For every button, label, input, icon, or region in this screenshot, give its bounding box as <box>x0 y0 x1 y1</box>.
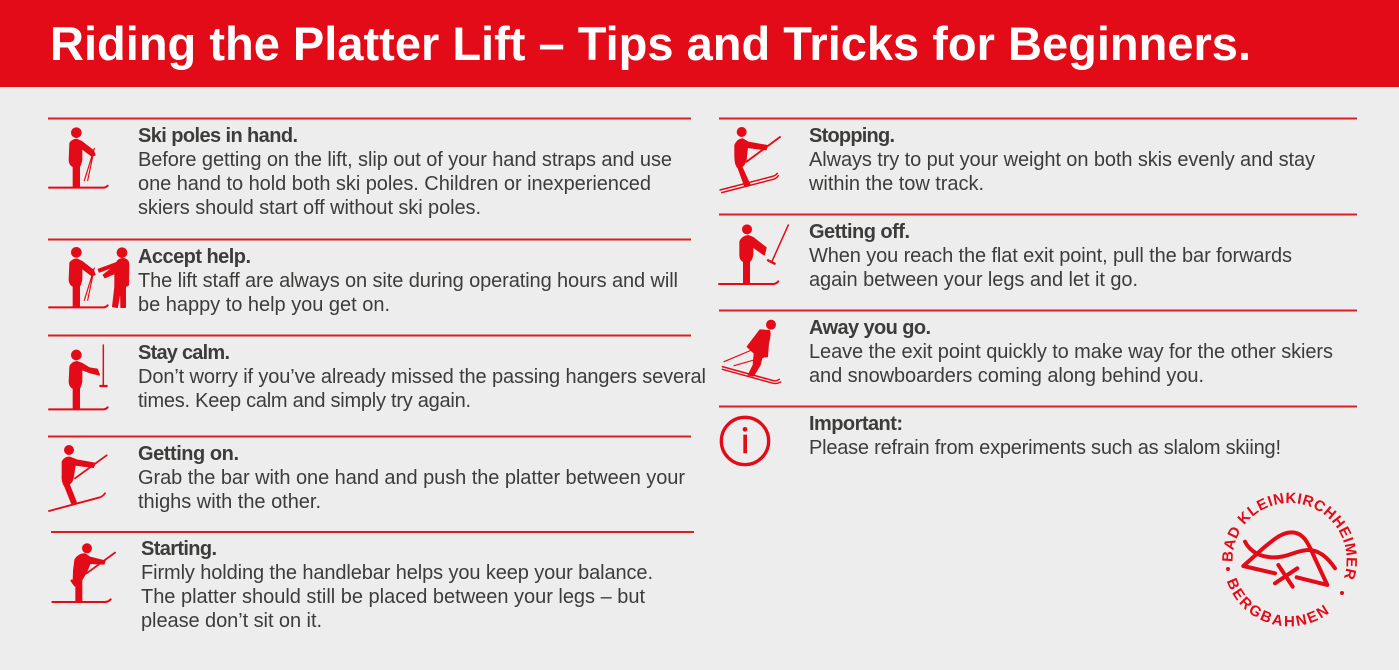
tip: getting on: Getting on. <box>138 443 239 465</box>
tip: stay calm <box>48 336 706 412</box>
tip: stay calm: Don’t worry if you’ve already missed the passing hangers several <box>138 366 706 388</box>
tip: ski poles in hand: skiers should start off without ski poles. <box>138 197 481 219</box>
icon: skier leaving downhill <box>722 320 781 383</box>
tip: stay calm: times. Keep calm and simply try again. <box>138 390 471 412</box>
tip: stay calm: Stay calm. <box>138 342 230 364</box>
icon: skier starting on lift <box>52 543 115 602</box>
tip: accept help: The lift staff are always on site during operating hours and will <box>138 270 678 292</box>
tip: getting off: again between your legs and let it go. <box>809 269 1138 291</box>
tip: away you go: and snowboarders coming along behind you. <box>809 365 1204 387</box>
header banner <box>0 0 1399 87</box>
tip: accept help <box>48 240 691 316</box>
logo: Bad Kleinkirchheimer Bergbahnen: BAD KLEINKIRCHHEIMER <box>1222 492 1357 580</box>
tip: getting on: Grab the bar with one hand and push the platter between your <box>138 467 685 489</box>
icon: skier with lift staff <box>49 247 129 307</box>
tip: starting: Firmly holding the handlebar helps you keep your balance. <box>141 562 653 584</box>
tip: getting off <box>719 214 1357 291</box>
tip: ski poles in hand: Before getting on the lift, slip out of your hand straps and use <box>138 149 672 171</box>
tip: ski poles in hand: Ski poles in hand. <box>138 125 298 147</box>
tip: starting <box>51 532 694 632</box>
tip: stopping: Stopping. <box>809 125 895 147</box>
icon: information circle <box>721 417 769 465</box>
tip: away you go: Away you go. <box>809 317 931 339</box>
icon: skier riding uphill <box>720 127 780 193</box>
tip: getting on <box>48 436 691 513</box>
tip: ski poles in hand <box>48 118 691 219</box>
tip: stopping: Always try to put your weight on both skis evenly and stay <box>809 149 1315 171</box>
tip: away you go <box>719 310 1357 387</box>
tip: important: Important: <box>809 413 903 435</box>
tip: getting off: When you reach the flat exit point, pull the bar forwards <box>809 245 1292 267</box>
tip: away you go: Leave the exit point quickly to make way for the other skiers <box>809 341 1333 363</box>
logo: Bad Kleinkirchheimer Bergbahnen: BERGBAHNEN <box>1226 578 1329 626</box>
icon: skier releasing bar <box>719 224 788 284</box>
tip: getting off: Getting off. <box>809 221 910 243</box>
tip: important <box>719 406 1357 465</box>
tip: starting: The platter should still be placed between your legs – but <box>141 586 645 608</box>
tip: important: Please refrain from experiments such as slalom skiing! <box>809 437 1281 459</box>
icon: skier grabbing bar on slope <box>49 445 107 511</box>
title: Riding the Platter Lift – Tips and Tricks for Beginners. <box>50 17 1251 70</box>
tip: stopping: within the tow track. <box>808 173 984 195</box>
icon: skier holding poles <box>49 127 108 188</box>
tip: accept help: Accept help. <box>138 246 251 268</box>
tip: stopping <box>719 118 1357 195</box>
tip: starting: please don’t sit on it. <box>141 610 322 632</box>
tip: accept help: be happy to help you get on. <box>138 294 390 316</box>
logo: Bad Kleinkirchheimer Bergbahnen <box>1222 492 1357 626</box>
tip: ski poles in hand: one hand to hold both ski poles. Children or inexperienced <box>138 173 651 195</box>
icon: skier reaching toward hanger <box>49 345 108 409</box>
tip: starting: Starting. <box>141 538 217 560</box>
tip: getting on: thighs with the other. <box>138 491 321 513</box>
